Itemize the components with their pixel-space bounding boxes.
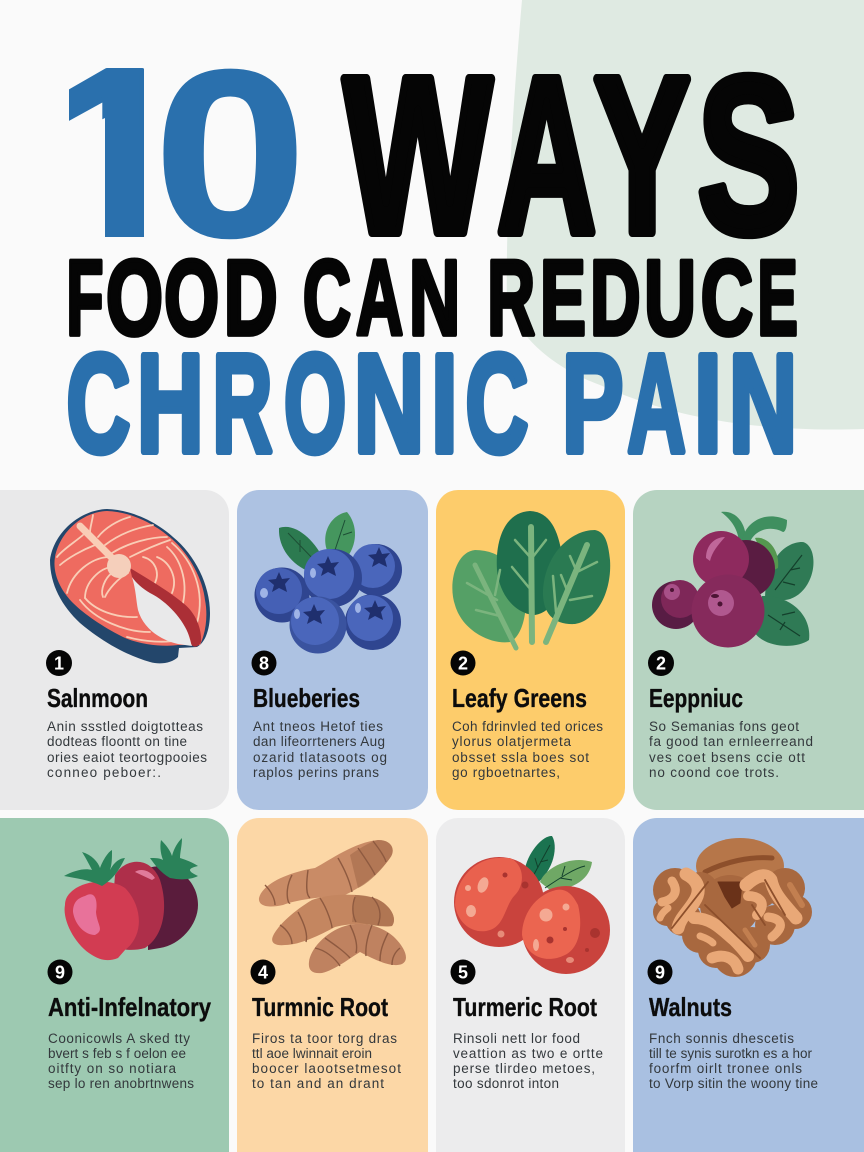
icon: purple berries (652, 512, 813, 648)
text block: description (252, 1031, 401, 1091)
badge: 9: 9 (55, 962, 65, 982)
heading: card title: Blueberies (253, 683, 360, 713)
panel: leafy greens (436, 490, 625, 810)
text block: description: go rgboetnartes, (452, 765, 560, 780)
text block: description: Anin ssstled doigtotteas (47, 719, 203, 734)
heading: chronic pain (66, 325, 797, 482)
icon: blueberries (254, 512, 402, 654)
heading: chronic pain: O (284, 326, 346, 482)
heading: food can reduce: U (644, 240, 696, 358)
heading: card title: Turmeric Root (453, 992, 597, 1022)
text block: description: sep lo ren anobrtnwens (48, 1076, 194, 1091)
text block: description: dan lifeorrteners Aug (253, 734, 385, 749)
icon: walnut (653, 838, 812, 977)
heading: chronic pain: H (137, 326, 204, 482)
heading: chronic pain: R (212, 326, 272, 482)
text block: description: oitfty on so notiara (48, 1061, 176, 1076)
heading: card title: Salnmoon (47, 683, 148, 713)
text block: description: veattion as two e ortte (453, 1046, 603, 1061)
text block: description: obsset ssla boes sot (452, 750, 589, 765)
heading: chronic pain: C (466, 325, 528, 482)
text block: description: Fnch sonnis dhescetis (649, 1031, 794, 1046)
title (42, 19, 800, 482)
heading: chronic pain: P (562, 326, 623, 482)
heading: WAYS: A (497, 32, 596, 280)
heading: chronic pain: N (729, 326, 797, 482)
heading: food can reduce (66, 238, 798, 358)
heading: food can reduce: F (66, 240, 103, 358)
text block: description: Ant tneos Hetof ties (253, 719, 383, 734)
heading: food can reduce: D (224, 240, 278, 358)
panel: blueberries (237, 490, 428, 810)
badge: 2 (252, 650, 276, 676)
text block: description: Firos ta toor torg dras (252, 1031, 397, 1046)
icon: red fruit with leaves (454, 836, 610, 974)
heading: food can reduce: C (303, 239, 351, 357)
badge: 9 (48, 960, 72, 984)
badge: 9: 9 (655, 962, 665, 982)
icon: salmon steak (50, 509, 210, 663)
badge: 9 (648, 960, 672, 984)
text block: description: boocer laootsetmesot (252, 1061, 401, 1076)
text block: description: foorfm oirlt tronee onls (649, 1061, 802, 1076)
text block: description: ttl aoe lwinnait eroin (252, 1046, 372, 1061)
text block: description: ozarid tlatasoots og (253, 750, 387, 765)
heading: food can reduce: N (409, 239, 460, 358)
heading: food can reduce: A (356, 238, 403, 357)
icon: apples (64, 838, 198, 960)
text block: description: So Semanias fons geot (649, 719, 799, 734)
panel: walnuts (633, 818, 864, 1152)
panel: berries (633, 490, 864, 810)
badge: 4: 4 (258, 962, 268, 982)
text block: description: Coh fdrinvled ted orices (452, 719, 603, 734)
heading: food can reduce: E (757, 240, 798, 358)
heading: food can reduce: E (540, 238, 586, 357)
heading: food can reduce: O (164, 239, 219, 358)
text block: description (253, 719, 387, 780)
panel: salmon (0, 490, 229, 810)
heading: card title: Turmnic Root (252, 992, 388, 1022)
badge: 1 (46, 650, 72, 676)
heading: card title: Eeppniuc (649, 683, 743, 713)
text block: description: no coond coe trots. (649, 765, 779, 780)
text block: description (453, 1031, 603, 1091)
badge: 1: 1 (54, 654, 64, 674)
text block: description (452, 719, 603, 780)
text block: description: too sdonrot inton (453, 1076, 559, 1091)
heading: chronic pain: I (694, 325, 722, 481)
badge: 2: 2 (656, 654, 666, 674)
heading: chronic pain: I (431, 326, 458, 482)
heading: card title: Leafy Greens (452, 683, 587, 713)
background shape: pale green corner (507, 0, 864, 429)
badge: 2 (450, 650, 476, 676)
text block: description: ylorus olatjermeta (452, 734, 571, 749)
icon: turmeric root (259, 840, 406, 973)
panel: turmeric (237, 818, 428, 1152)
text block: description: dodteas floontt on tine (47, 734, 187, 749)
heading: food can reduce: O (106, 239, 163, 358)
heading: WAYS: Y (594, 30, 690, 279)
badge: 5 (450, 960, 476, 984)
text block: description: ories eaiot teortogpooies (47, 750, 207, 765)
badge: 2: 2 (458, 654, 468, 674)
badge: 2: 8 (259, 654, 269, 674)
heading: food can reduce: D (590, 239, 641, 358)
heading: chronic pain: C (66, 325, 130, 481)
text block: description (649, 1031, 818, 1091)
text block: description: perse tlirdeo metoes, (453, 1061, 595, 1076)
heading: 10: 1 (42, 19, 192, 286)
text block: description (48, 1031, 194, 1091)
text block: description: Coonicowls A sked tty (48, 1031, 190, 1046)
text block: description: ves coet bsens ccie ott (649, 750, 805, 765)
badge: 4 (250, 960, 276, 984)
text block: description: Rinsoli nett lor food (453, 1031, 580, 1046)
heading: 10 (69, 68, 296, 240)
text block: description: conneo peboer:. (47, 765, 161, 780)
text block: description (649, 719, 813, 780)
heading: chronic pain: A (627, 327, 686, 482)
badge: 2 (648, 650, 674, 676)
panel: red fruit (436, 818, 625, 1152)
icon: spinach leaves (452, 511, 610, 648)
heading: WAYS: S (698, 32, 800, 280)
heading: card title: Walnuts (649, 992, 732, 1022)
heading: card title: Anti-Infelnatory (48, 992, 211, 1022)
text block: description: till te synis surotkn es a hor (649, 1046, 812, 1061)
heading: food can reduce: C (701, 240, 753, 358)
badge: 5: 5 (458, 962, 468, 982)
heading: WAYS: W (344, 31, 492, 279)
text block: description (47, 719, 207, 780)
panel: anti-inflammatory (0, 818, 229, 1152)
heading: chronic pain: N (354, 325, 424, 482)
text block: description: to tan and an drant (252, 1076, 384, 1091)
text block: description: to Vorp sitin the woony tine (649, 1076, 818, 1091)
text block: description: bvert s feb s f oelon ee (48, 1046, 186, 1061)
heading: 10: 0 (154, 22, 306, 287)
text block: description: fa good tan ernleerreand (649, 734, 813, 749)
heading: WAYS (344, 30, 800, 280)
heading: food can reduce: R (487, 239, 535, 357)
text block: description: raplos perins prans (253, 765, 379, 780)
